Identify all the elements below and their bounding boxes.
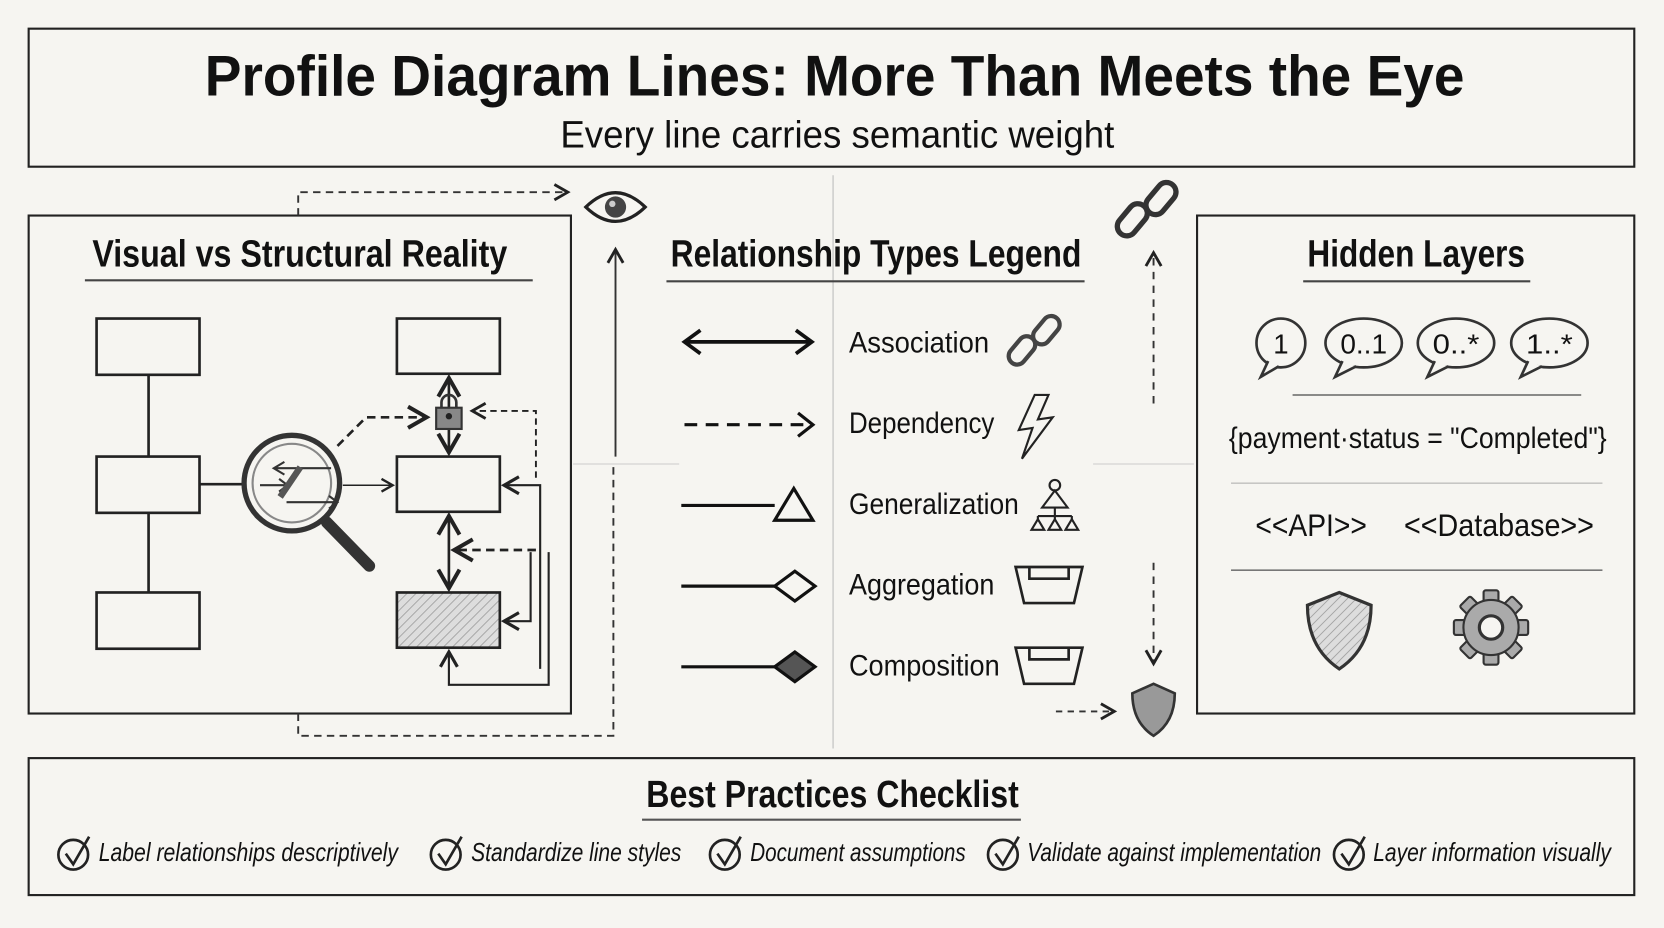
row: association bbox=[684, 313, 1063, 368]
panel: hidden layers: 1 bbox=[1273, 329, 1289, 360]
row: aggregation bbox=[681, 567, 1082, 603]
heading: Relationship Types Legend bbox=[671, 232, 1081, 276]
structural boxes with arrows bbox=[337, 319, 549, 685]
connector arrows bbox=[298, 175, 1194, 749]
heading: Hidden Layers bbox=[1307, 232, 1525, 276]
row: composition bbox=[681, 648, 1082, 684]
icon: magnifier bbox=[244, 435, 369, 566]
icon: gear bbox=[1454, 590, 1528, 665]
icon: shield small bbox=[1132, 684, 1175, 736]
icon: eye bbox=[586, 193, 645, 221]
left simple boxes bbox=[97, 319, 244, 649]
checklist items: Document assumptions bbox=[750, 839, 966, 867]
panel: best practices checklist bbox=[29, 758, 1634, 895]
panel: relationship types legend bbox=[666, 232, 1085, 684]
icon: chain link bbox=[1113, 179, 1180, 240]
heading: Best Practices Checklist bbox=[646, 773, 1019, 816]
checklist items bbox=[99, 839, 1613, 867]
row: dependency bbox=[684, 395, 1053, 459]
panel: hidden layers: 0..* bbox=[1433, 329, 1480, 360]
panel: hidden layers: <<Database>> bbox=[1404, 507, 1594, 543]
panel: visual vs structural reality bbox=[29, 216, 571, 714]
row: aggregation: Aggregation bbox=[849, 569, 994, 602]
checklist items: Label relationships descriptively bbox=[99, 839, 400, 867]
heading: Visual vs Structural Reality bbox=[92, 232, 508, 276]
checklist items: Standardize line styles bbox=[471, 839, 682, 867]
checklist items: Validate against implementation bbox=[1027, 839, 1321, 867]
row: association: Association bbox=[849, 327, 989, 360]
row: generalization: Generalization bbox=[849, 488, 1019, 521]
icon: shield bbox=[1307, 592, 1371, 669]
multiplicity bubbles bbox=[1256, 319, 1588, 377]
subtitle: Every line carries semantic weight bbox=[560, 114, 1115, 157]
panel: hidden layers: 1..* bbox=[1526, 329, 1573, 360]
row: composition: Composition bbox=[849, 649, 1000, 682]
icon: lock bbox=[436, 395, 462, 429]
panel: hidden layers: 0..1 bbox=[1340, 329, 1387, 360]
stereotypes: <<API>> bbox=[1255, 507, 1367, 543]
constraint text: {payment·status = "Completed"} bbox=[1229, 422, 1607, 455]
row: generalization bbox=[681, 480, 1078, 530]
title: Profile Diagram Lines: More Than Meets the Eye bbox=[205, 45, 1464, 109]
row: dependency: Dependency bbox=[849, 407, 994, 440]
header panel bbox=[29, 29, 1634, 167]
checklist items: Layer information visually bbox=[1373, 839, 1613, 867]
panel: hidden layers bbox=[1197, 216, 1634, 714]
